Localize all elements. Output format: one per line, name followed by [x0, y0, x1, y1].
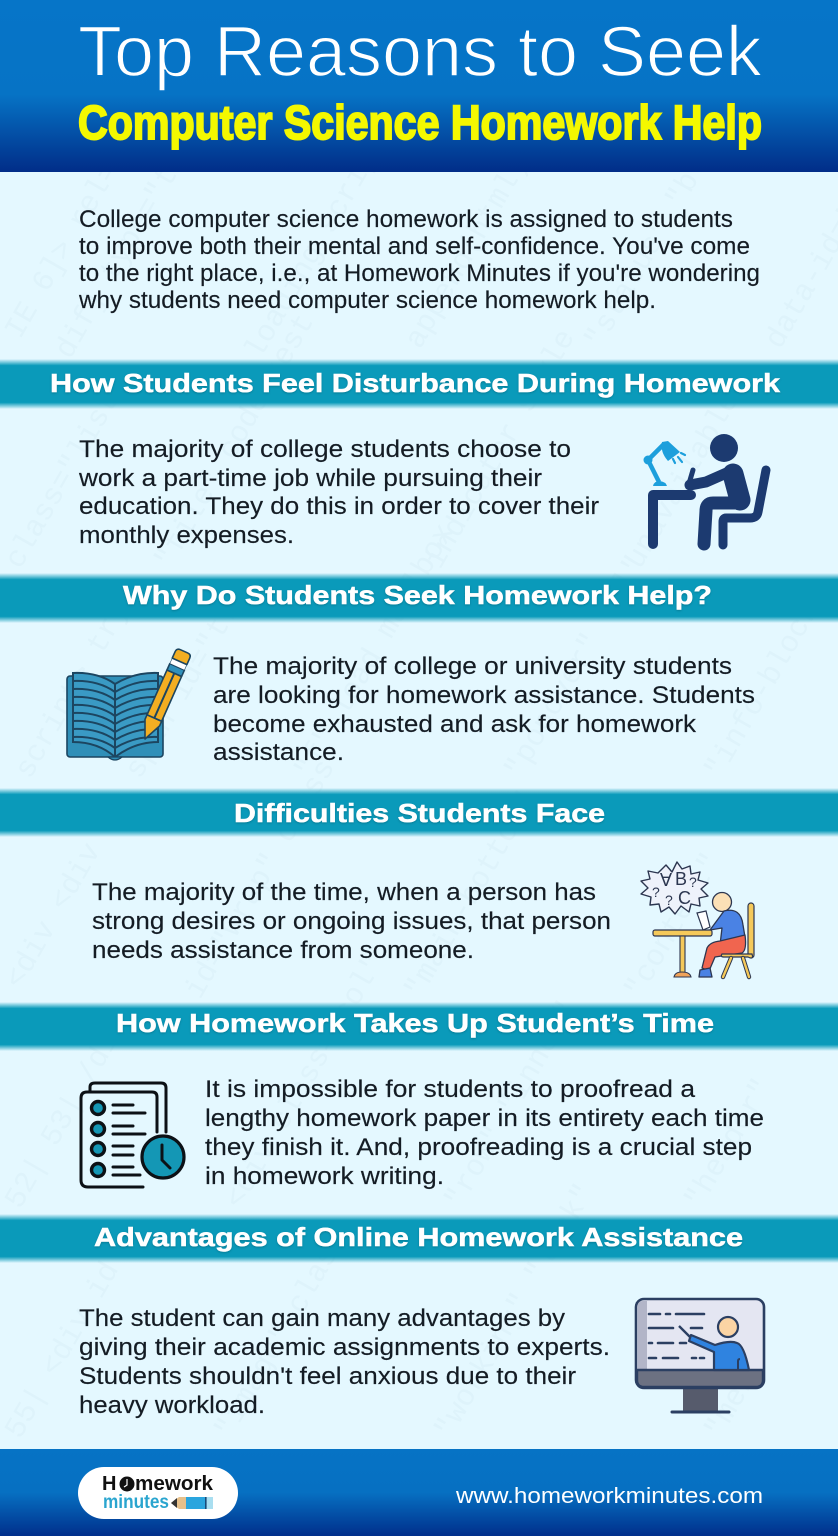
section text: become exhausted and ask for homework: [213, 711, 697, 738]
code watermark background: unavailable: [619, 386, 748, 575]
section text: [92, 879, 611, 964]
code watermark background: <div class="col": [219, 949, 393, 1215]
section text: The student can gain many advantages by: [79, 1305, 565, 1332]
panel: difficulties students face: [0, 788, 838, 977]
section heading band: [0, 1214, 838, 1263]
icon: confused student at table: ?: [652, 884, 660, 900]
section text: needs assistance from someone.: [92, 937, 474, 964]
code watermark background: "f" load mailbox: [289, 519, 463, 785]
code watermark background: "image" class: [209, 1225, 356, 1445]
header banner: [0, 0, 838, 172]
code watermark background: class="list": [0, 371, 137, 575]
intro text: College computer science homework is assigned to students: [79, 206, 733, 233]
code watermark background: script> try: [9, 596, 138, 785]
icon: confused student at table: [641, 862, 754, 977]
icon: checklist and clock: [81, 1083, 184, 1187]
code watermark background: "popover" "dl": [499, 550, 655, 785]
code watermark background: 52| 53| /div: [0, 1011, 137, 1215]
section text: assistance.: [213, 739, 344, 766]
code watermark background: 55| <div id: [0, 1256, 128, 1445]
section text: heavy workload.: [79, 1392, 265, 1419]
code watermark background: span id="t7": [119, 581, 257, 785]
title: Top Reasons to Seek: [78, 13, 763, 92]
section text: they finish it. And, proofreading is a crucial step: [205, 1134, 752, 1161]
panel: disturbance during homework: [0, 359, 838, 549]
section heading band: How Students Feel Disturbance During Homework: [50, 368, 781, 398]
section text: strong desires or ongoing issues, that person: [92, 908, 611, 935]
section text: The majority of the time, when a person has: [92, 879, 596, 906]
section text: in homework writing.: [205, 1163, 444, 1190]
logo: mework: [135, 1473, 214, 1495]
icon: confused student at table: B: [675, 869, 687, 889]
panel: advantages of online assistance: [0, 1214, 838, 1419]
code watermark background: "row" "inner": [439, 995, 586, 1215]
intro text: why students need computer science homework help.: [78, 287, 656, 314]
section text: [213, 653, 755, 766]
website url: www.homeworkminutes.com: [455, 1483, 763, 1508]
logo: H: [102, 1473, 116, 1495]
section heading band: [0, 359, 838, 409]
code watermark background: "working" "link": [429, 1179, 603, 1445]
icon: confused student at table: A: [660, 869, 672, 889]
section text: The majority of college students choose to: [79, 436, 571, 463]
intro text: to the right place, i.e., at Homework Minutes if you're wondering: [79, 260, 760, 287]
icon: confused student at table: ?: [665, 892, 673, 908]
logo: [78, 1467, 238, 1519]
icon: student at desk with lamp: [644, 434, 766, 545]
footer banner: [0, 1449, 838, 1536]
icon: open book and pencil: [67, 648, 191, 760]
icon: confused student at table: ?: [689, 874, 697, 890]
panel: how homework takes up time: [0, 1002, 838, 1190]
code watermark background: "content": [619, 848, 730, 1005]
section heading band: Why Do Students Seek Homework Help?: [123, 580, 712, 610]
section text: giving their academic assignments to experts.: [79, 1334, 610, 1361]
section heading band: [0, 573, 838, 623]
intro text: to improve both their mental and self-confidence. You've come: [79, 233, 750, 260]
code watermark background: <div <div: [0, 838, 110, 995]
section text: [78, 436, 599, 549]
section heading band: Difficulties Students Face: [234, 798, 605, 828]
icon: confused student at table: C: [678, 888, 691, 908]
section heading band: [0, 1002, 838, 1051]
code watermark background: id="wrap" class: [179, 754, 344, 1005]
code watermark background: "header": [679, 1073, 781, 1215]
section text: work a part-time job while pursuing their: [78, 465, 542, 492]
code watermark background: loading script: [239, 130, 395, 365]
code watermark background: dif] type="text/css": [49, 36, 259, 365]
intro text: [78, 206, 760, 314]
section text: Students shouldn't feel anxious due to their: [79, 1363, 576, 1390]
section heading band: How Homework Takes Up Student’s Time: [116, 1008, 714, 1038]
code watermark background: "info-block": [699, 581, 837, 785]
code watermark background: "main-bottom": [399, 785, 546, 1005]
code watermark background: "status" "block": [579, 89, 753, 355]
section text: The majority of college or university students: [213, 653, 732, 680]
code watermark background: "ment": [699, 1334, 783, 1445]
section heading band: [0, 788, 838, 837]
icon: online tutor on monitor: [636, 1299, 764, 1412]
section text: [79, 1305, 610, 1419]
section text: monthly expenses.: [79, 522, 294, 549]
panel: why seek homework help: [0, 573, 838, 766]
section text: lengthy homework paper in its entirety each time: [205, 1105, 764, 1132]
code watermark background: append(html) span: [399, 73, 582, 355]
logo: minutes: [103, 1492, 169, 1513]
section text: are looking for homework assistance. Students: [213, 682, 755, 709]
section text: [205, 1076, 764, 1190]
section heading band: Advantages of Online Homework Assistance: [94, 1222, 743, 1252]
section text: education. They do this in order to cover their: [79, 493, 599, 520]
section text: It is impossible for students to proofread a: [205, 1076, 696, 1103]
code watermark background: "file" code test: [149, 309, 323, 575]
code watermark background: indicator style: [419, 324, 584, 575]
